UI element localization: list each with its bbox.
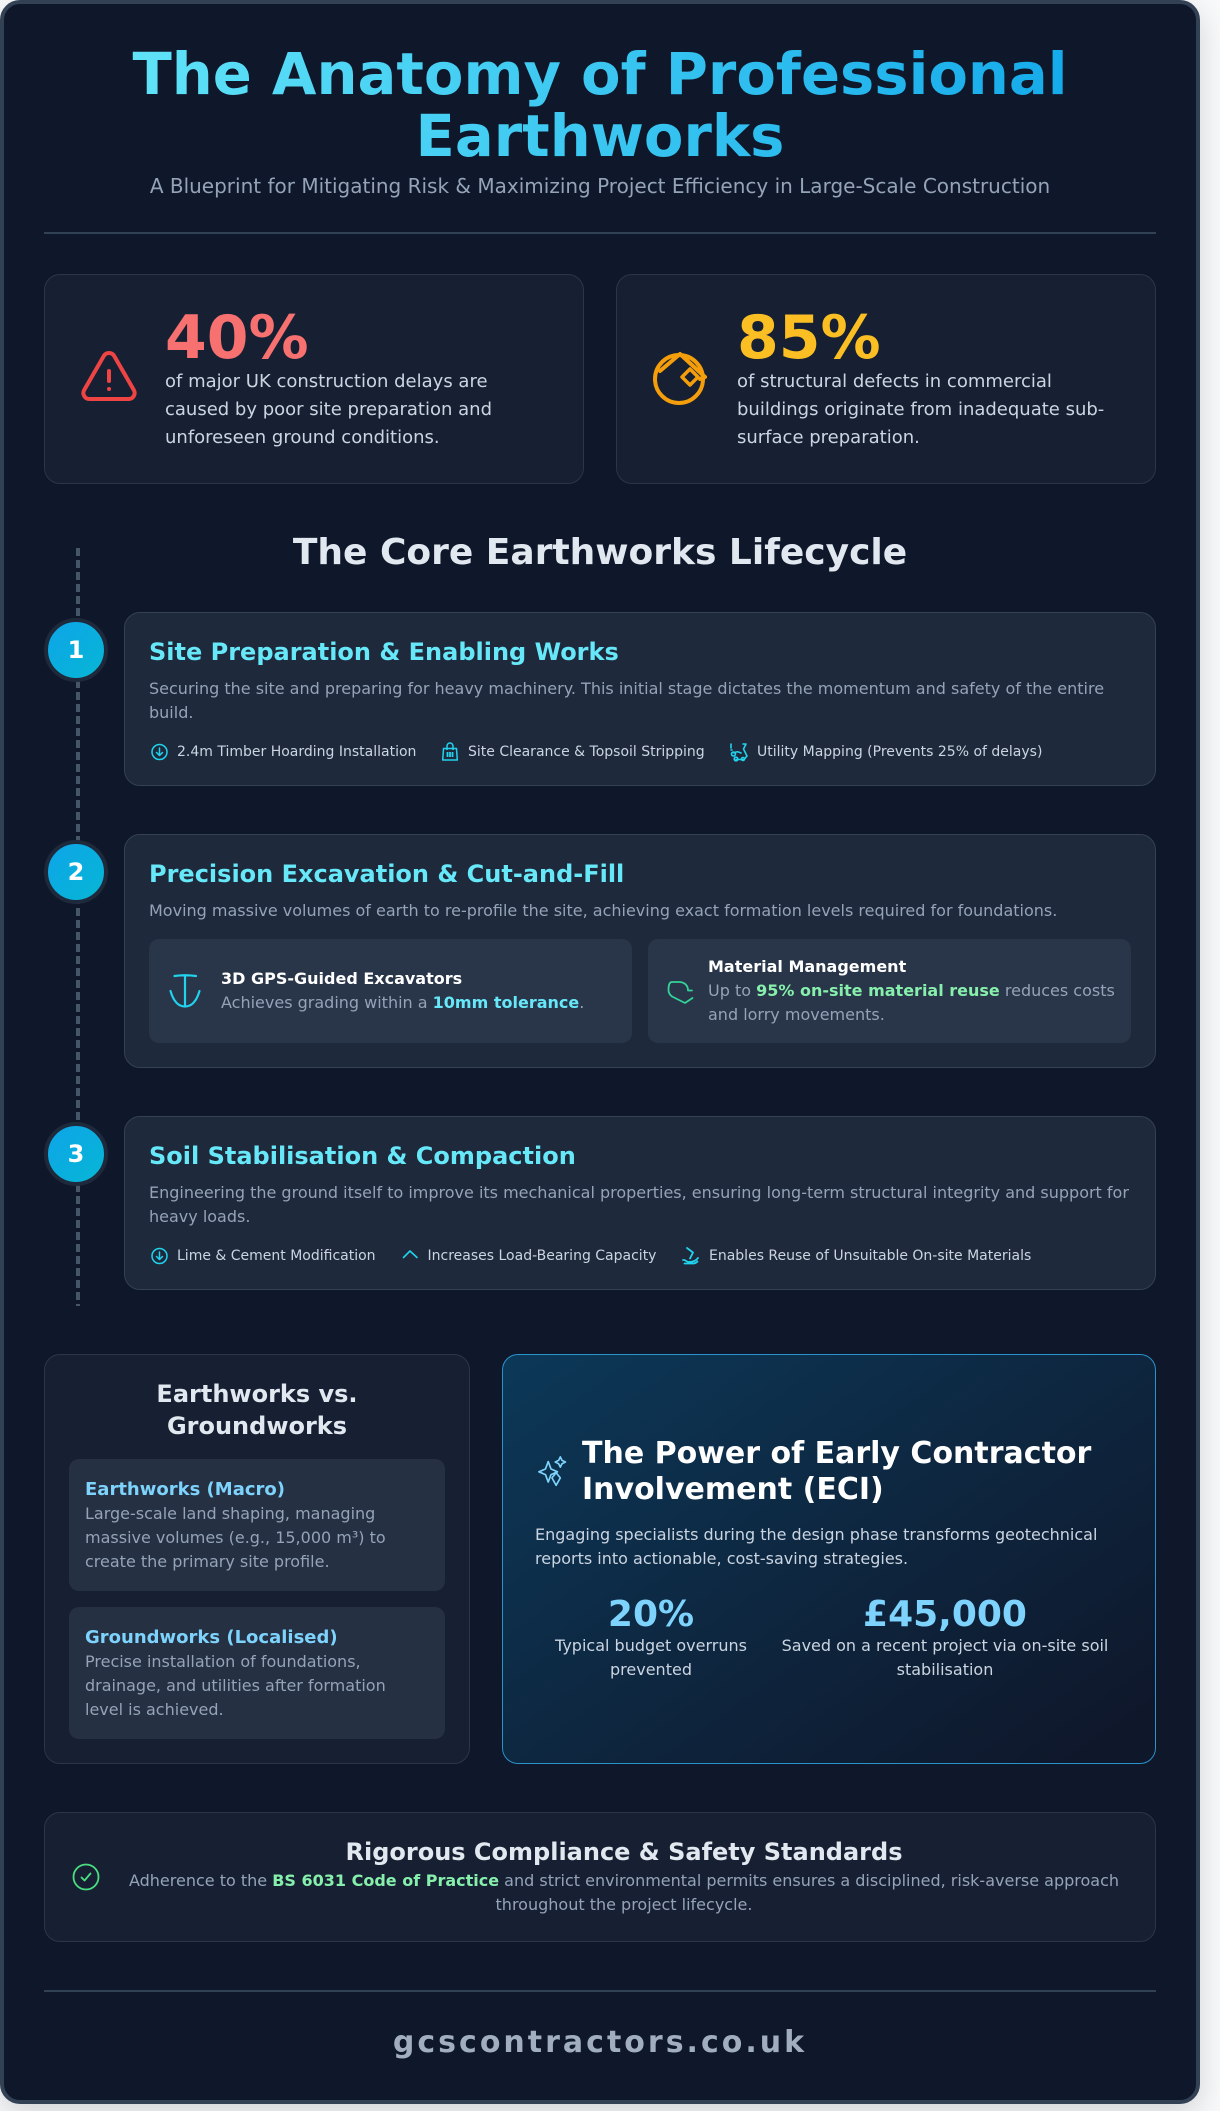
- sub-panel: earthworks: [69, 1459, 445, 1591]
- title: [44, 44, 1156, 167]
- panel: step 1: [124, 612, 1156, 786]
- feature: lime and cement: Lime & Cement Modification: [177, 1248, 376, 1264]
- stat text: of structural defects in commercial: [737, 371, 1052, 392]
- stat text: [165, 371, 492, 448]
- sub-panel: groundworks: Groundworks (Localised): [85, 1627, 338, 1648]
- stat text: surface preparation.: [737, 427, 920, 448]
- title: The Anatomy of Professional: [132, 41, 1068, 108]
- icon: route: [730, 743, 748, 762]
- ECI text: [535, 1525, 1097, 1568]
- stat number 40%: 40%: [165, 303, 309, 373]
- step 3 description: heavy loads.: [149, 1206, 250, 1226]
- comparison heading: [156, 1380, 358, 1440]
- step 3 description: Engineering the ground itself to improve its mechanical properties, ensuring long-term structural integrity and support for: [149, 1182, 1129, 1202]
- stat: 20%: prevented: [610, 1660, 692, 1679]
- sub-panel: groundworks: Precise installation of foundations,: [85, 1652, 361, 1671]
- footer url: gcscontractors.co.uk: [393, 2025, 807, 2060]
- comparison heading: Earthworks vs.: [156, 1380, 358, 1408]
- sub-panel: groundworks: drainage, and utilities after formation: [85, 1676, 386, 1695]
- material text: Up to 95% on-site material reuse reduces costs: [708, 981, 1115, 1000]
- sub-panel: groundworks: level is achieved.: [85, 1700, 224, 1719]
- stat number 85%: 85%: [737, 303, 881, 373]
- panel: stat 40%: [44, 274, 584, 484]
- step 1 description: [149, 679, 1104, 722]
- step 1 title: Site Preparation & Enabling Works: [149, 638, 619, 666]
- GPS text: [221, 969, 584, 1012]
- stat: 20%: [554, 1594, 747, 1679]
- sub-panel: GPS excavators: [149, 939, 632, 1043]
- sub-panel: earthworks: create the primary site profile.: [85, 1552, 330, 1570]
- step 2 description: Moving massive volumes of earth to re-profile the site, achieving exact formation levels required for foundations.: [149, 901, 1057, 920]
- compliance text: throughout the project lifecycle.: [496, 1895, 752, 1914]
- step 3 description: [149, 1182, 1129, 1226]
- feature: utility mapping: Utility Mapping (Prevents 25% of delays): [757, 744, 1042, 760]
- step 3 marker: [44, 1122, 108, 1186]
- icon: sparkles: [538, 1456, 566, 1486]
- step 2 title: Precision Excavation & Cut-and-Fill: [149, 860, 624, 888]
- material text: and lorry movements.: [708, 1005, 885, 1024]
- feature: load bearing: Increases Load-Bearing Capacity: [428, 1248, 656, 1264]
- ECI text: reports into actionable, cost-saving strategies.: [535, 1549, 908, 1568]
- GPS text: 3D GPS-Guided Excavators: [221, 969, 462, 988]
- comparison heading: Groundworks: [167, 1412, 347, 1440]
- stat: 45,000: Saved on a recent project via on-site soil: [782, 1636, 1108, 1655]
- stat text: buildings originate from inadequate sub-: [737, 399, 1104, 420]
- icon: bag: [442, 742, 458, 761]
- ECI text: Engaging specialists during the design phase transforms geotechnical: [535, 1525, 1097, 1544]
- stat text: of major UK construction delays are: [165, 371, 488, 392]
- step 1 marker: 1: [68, 636, 84, 664]
- compliance heading: Rigorous Compliance & Safety Standards: [346, 1838, 902, 1866]
- stat: 20%: Typical budget overruns: [555, 1636, 747, 1655]
- heading: lifecycle: The Core Earthworks Lifecycle: [293, 532, 907, 573]
- stat: 20%: 20%: [608, 1594, 694, 1635]
- icon: check circle: [72, 1864, 100, 1890]
- panel: earthworks vs groundworks: [44, 1354, 470, 1764]
- icon: warning triangle: [81, 351, 137, 401]
- stat: 45,000: stabilisation: [897, 1660, 993, 1679]
- step 2 marker: 2: [68, 858, 84, 886]
- feature: timber hoarding: 2.4m Timber Hoarding Installation: [177, 744, 416, 760]
- sub-panel: earthworks: Earthworks (Macro): [85, 1478, 285, 1500]
- icon: recycle loop: [668, 981, 694, 1004]
- sub-panel: earthworks: Large-scale land shaping, managing: [85, 1504, 375, 1522]
- sub-panel: groundworks: [69, 1607, 445, 1739]
- material text: Material Management: [708, 957, 906, 976]
- feature: material reuse: Enables Reuse of Unsuitable On-site Materials: [709, 1248, 1031, 1264]
- ECI heading: Involvement (ECI): [582, 1472, 884, 1507]
- ECI heading: The Power of Early Contractor: [582, 1436, 1091, 1471]
- material text: [708, 957, 1115, 1024]
- GPS text: Achieves grading within a 10mm tolerance.: [221, 993, 584, 1012]
- icon: chevron up: [402, 1250, 418, 1258]
- subtitle: A Blueprint for Mitigating Risk & Maximizing Project Efficiency in Large-Scale Construction: [150, 174, 1050, 198]
- step 3 marker: 3: [68, 1140, 84, 1168]
- panel: stat 85%: [616, 274, 1156, 484]
- compliance text: [129, 1871, 1119, 1914]
- timeline line: [76, 548, 80, 1306]
- step 3 title: Soil Stabilisation & Compaction: [149, 1142, 576, 1170]
- sub-panel: material management: [648, 939, 1131, 1043]
- ECI heading: [582, 1436, 1092, 1507]
- panel: early contractor involvement: [502, 1354, 1156, 1764]
- compliance text: Adherence to the BS 6031 Code of Practice and strict environmental permits ensures a disciplined, risk-averse approach: [129, 1871, 1119, 1890]
- sub-panel: earthworks: massive volumes (e.g., 15,000 m³) to: [85, 1528, 386, 1546]
- step 1 marker: [44, 618, 108, 682]
- step 1 description: build.: [149, 703, 193, 722]
- icon: circle arrow: [151, 744, 168, 760]
- step 2 marker: [44, 840, 108, 904]
- panel: compliance: [44, 1812, 1156, 1942]
- stat: 45,000: £45,000: [863, 1594, 1027, 1635]
- icon: circle arrow: [151, 1248, 168, 1264]
- title: Earthworks: [416, 103, 784, 170]
- step 1 description: Securing the site and preparing for heavy machinery. This initial stage dictates the momentum and safety of the entire: [149, 679, 1104, 698]
- icon: defect circle: [653, 352, 708, 405]
- stat: 45,000: [782, 1594, 1108, 1679]
- stat text: unforeseen ground conditions.: [165, 427, 440, 448]
- stat text: [737, 371, 1104, 448]
- panel: step 3: [124, 1116, 1156, 1290]
- panel: step 2: [124, 834, 1156, 1068]
- icon: anchor: [169, 974, 201, 1008]
- icon: reuse: [682, 1247, 699, 1264]
- stat text: caused by poor site preparation and: [165, 399, 492, 420]
- feature: site clearance: Site Clearance & Topsoil Stripping: [468, 744, 705, 760]
